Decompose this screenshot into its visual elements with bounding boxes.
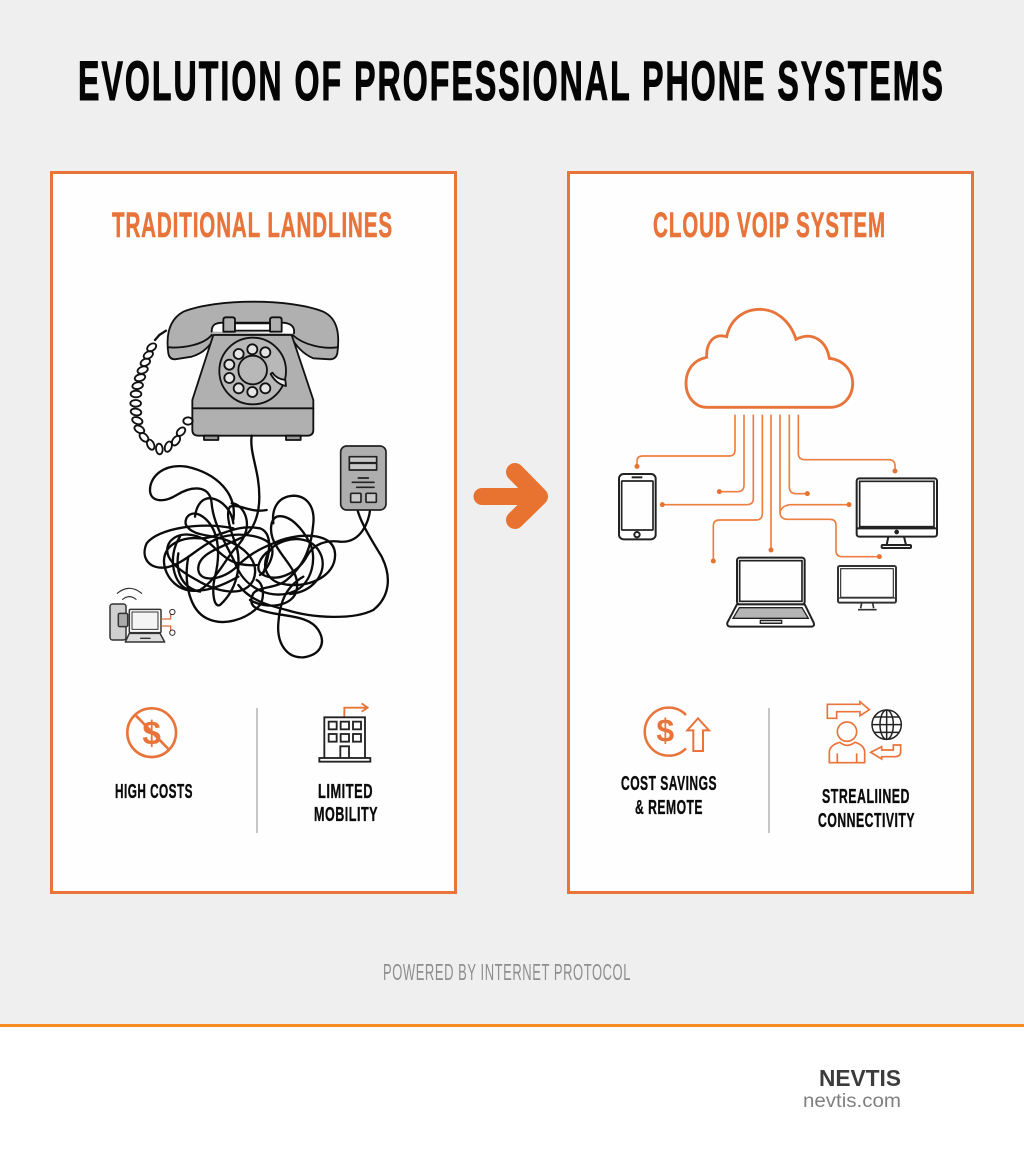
panel: cloud voip system [568, 172, 972, 892]
icon: cost savings: $ [656, 712, 674, 748]
icon: wall jack [341, 446, 386, 510]
label: streamlined connectivity [818, 786, 915, 832]
icon: office building [319, 703, 370, 762]
label: limited mobility: MOBILITY [314, 804, 378, 826]
icon: cloud [686, 309, 853, 407]
label: limited mobility [314, 781, 378, 826]
label: streamlined connectivity: CONNECTIVITY [818, 810, 915, 832]
icon: no dollar: $ [142, 715, 161, 752]
label: cost savings and remote [621, 773, 717, 819]
brand url: nevtis.com [803, 1091, 901, 1112]
icon: laptop [727, 558, 814, 627]
illustration: rotary phone with tangled wires [110, 302, 388, 657]
divider [768, 708, 770, 833]
arrow [482, 472, 539, 520]
label: streamlined connectivity: STREALIINED [822, 786, 910, 808]
heading: traditional landlines: TRADITIONAL LANDLINES [112, 206, 393, 245]
illustration: cloud network [619, 309, 937, 627]
icon: small phone and laptop [110, 588, 175, 642]
tangled wires [145, 436, 388, 657]
divider [256, 708, 258, 833]
icon: cost savings [645, 708, 709, 756]
icon: desktop monitor small [838, 566, 896, 610]
icon: no dollar [127, 708, 176, 757]
brand name: NEVTIS [819, 1065, 901, 1091]
icon: smartphone [619, 474, 656, 539]
connection lines [634, 415, 897, 563]
icon: rotary phone [168, 302, 338, 440]
icon: desktop monitor large [857, 478, 937, 548]
label: high costs: HIGH COSTS [115, 781, 193, 803]
label: cost savings and remote: & REMOTE [635, 797, 703, 819]
panel: traditional landlines [52, 172, 456, 892]
icon: coiled handset cord [130, 331, 193, 455]
label: limited mobility: LIMITED [318, 781, 373, 803]
tagline: POWERED BY INTERNET PROTOCOL [383, 959, 631, 985]
footer [0, 1024, 1024, 1154]
label: cost savings and remote: COST SAVINGS [621, 773, 717, 795]
icon: connectivity [827, 702, 901, 763]
